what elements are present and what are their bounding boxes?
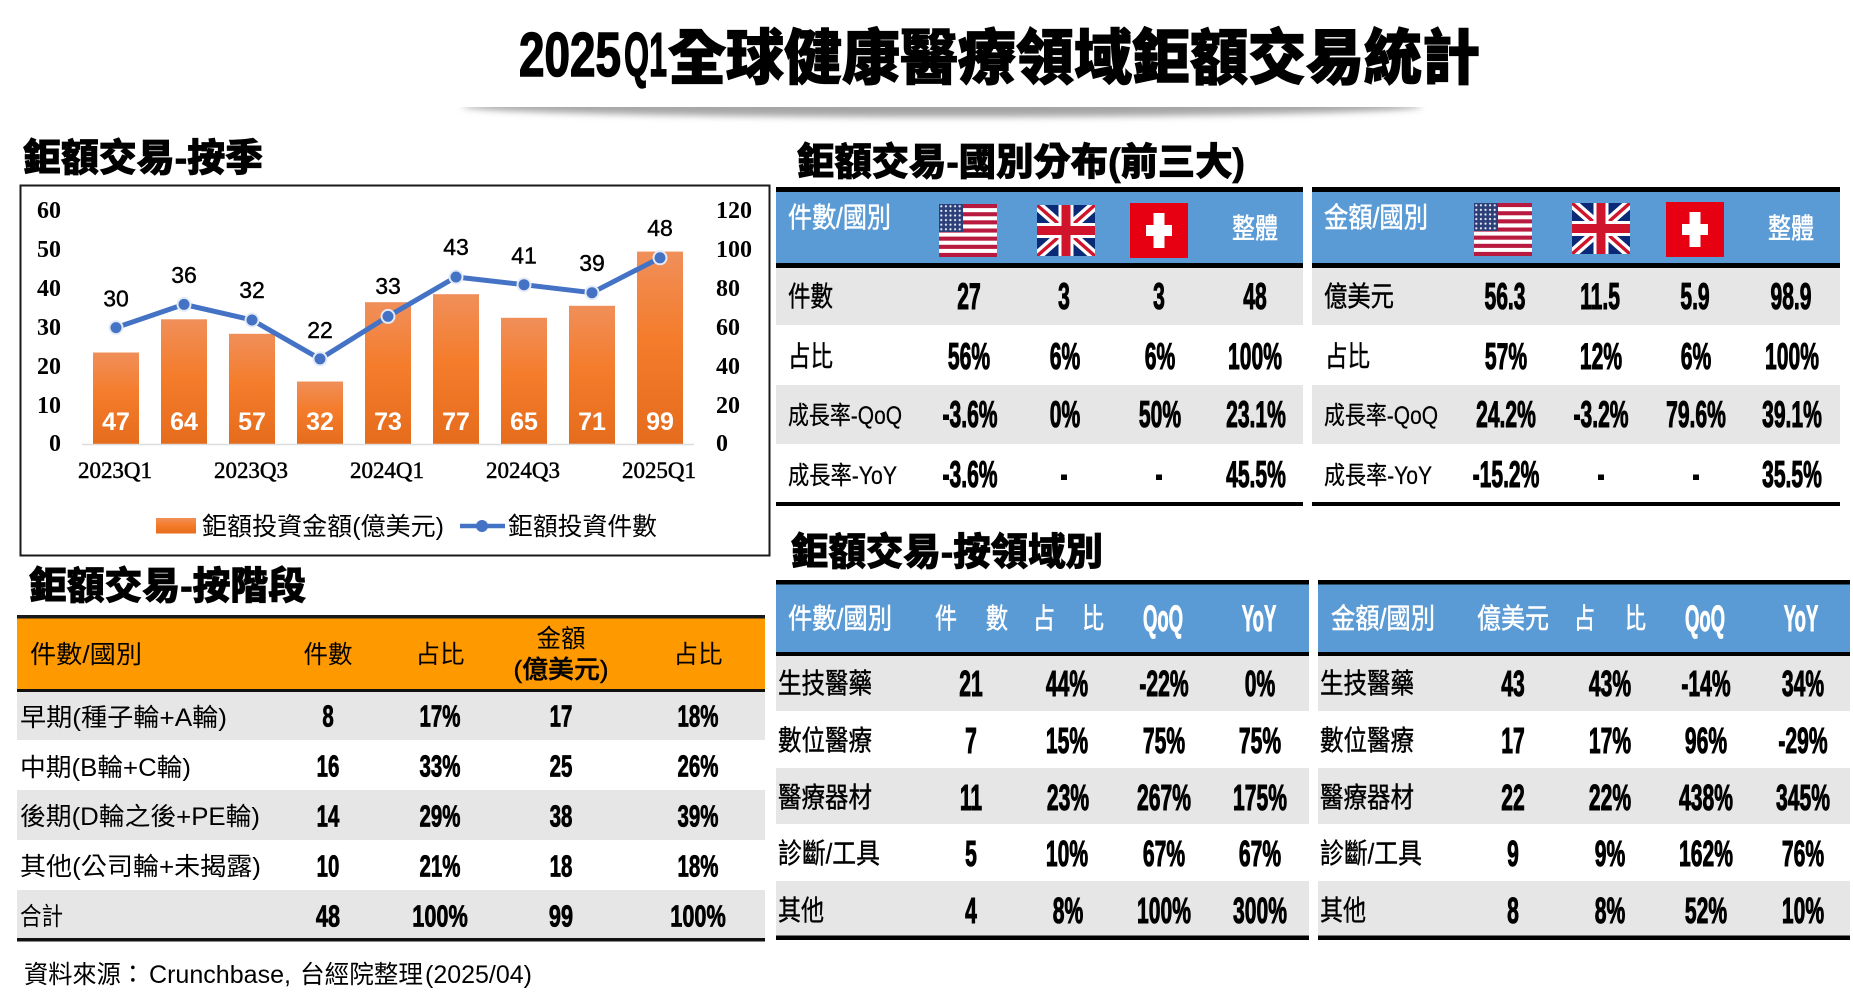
country count rows: 6% [1050, 337, 1080, 378]
sector count rows: 8% [1053, 891, 1083, 932]
sector count rows: 7 [965, 721, 977, 762]
sector amount rows: 43% [1589, 664, 1631, 705]
sector count rows: 267% [1137, 778, 1191, 819]
country count rows: 27 [957, 277, 981, 318]
stage table header [17, 615, 765, 692]
sector amount rows: 8 [1507, 891, 1519, 932]
bar value labels: 47 [102, 408, 130, 436]
stage rows: 後期(D輪之後+PE輪) [20, 803, 260, 831]
stage rows: 18 [550, 848, 572, 884]
x axis labels: 2023Q3 [214, 458, 288, 483]
panel: country count table [776, 187, 1303, 506]
stage table header: (億美元) [514, 656, 608, 684]
right axis labels: 60 [716, 315, 740, 341]
title: 全球健康醫療領域鉅額交易統計 [668, 25, 1480, 92]
stage rows: 17% [420, 698, 460, 734]
stage table header: 占比 [416, 641, 464, 669]
source note: (2025/04) [425, 961, 532, 989]
sector count header: 比 [1082, 603, 1104, 634]
country count rows: 6% [1145, 337, 1175, 378]
sector amount rows: 17 [1501, 721, 1525, 762]
sector amount rows: 52% [1685, 891, 1727, 932]
sector count rows: 175% [1233, 778, 1287, 819]
sector amount rows: 438% [1679, 778, 1733, 819]
country amount rows: 39.1% [1762, 395, 1822, 436]
stage rows: 10 [317, 848, 339, 884]
sector amount header: 占 [1574, 603, 1595, 634]
sector count rows: 11 [960, 778, 982, 819]
stage rows: 38 [550, 798, 572, 834]
x axis labels: 2025Q1 [622, 458, 696, 483]
sector amount rows: 345% [1776, 778, 1830, 819]
line value labels: 41 [511, 242, 537, 268]
x axis labels: 2024Q3 [486, 458, 560, 483]
icon: US flag [1474, 203, 1532, 256]
sector amount header: 億美元 [1477, 603, 1549, 634]
country amount rows: 57% [1485, 337, 1527, 378]
stage rows: 17 [550, 698, 572, 734]
stage rows: 29% [420, 798, 460, 834]
sector amount rows: 9 [1507, 834, 1519, 875]
stage rows [17, 692, 765, 942]
stage rows: 100% [670, 899, 726, 933]
country count rows: -3.6% [942, 455, 998, 496]
sector count rows: 醫療器材 [778, 782, 872, 813]
country count rows: 成長率-YoY [788, 462, 897, 490]
sector amount rows: 其他 [1320, 895, 1366, 926]
sector amount rows: 8% [1595, 891, 1625, 932]
sector count rows: 75% [1239, 721, 1281, 762]
sector count rows [776, 656, 1309, 940]
sector count rows: 44% [1046, 664, 1088, 705]
left axis labels: 0 [49, 431, 61, 457]
title: Q1 [624, 21, 667, 90]
sector amount rows: -29% [1778, 721, 1828, 762]
source note: 台經院整理 [300, 961, 423, 989]
country amount rows: 6% [1681, 337, 1711, 378]
line value labels: 30 [103, 286, 129, 312]
sector amount header [1318, 580, 1850, 656]
stage rows: 18% [678, 848, 718, 884]
country count rows: - [1060, 455, 1068, 496]
country count rows: 23.1% [1226, 395, 1286, 436]
line value labels: 33 [375, 273, 401, 299]
sector count header: 件 [935, 603, 957, 634]
country count header: 整體 [1232, 213, 1278, 244]
x axis labels: 2024Q1 [350, 458, 424, 483]
bar value labels [102, 408, 674, 436]
line value labels [103, 215, 673, 343]
sector count rows: 生技醫藥 [778, 668, 872, 699]
title: 2025 [519, 21, 621, 90]
left axis labels: 10 [37, 393, 61, 419]
country amount rows: 35.5% [1762, 455, 1822, 496]
panel: by stage table [17, 615, 765, 942]
heading: by stage: 鉅額交易-按階段 [29, 565, 306, 608]
line value labels: 48 [647, 215, 673, 241]
country count rows: 件數 [788, 281, 833, 312]
sector amount rows: 10% [1782, 891, 1824, 932]
bar value labels: 64 [170, 408, 198, 436]
stage table header: 件數/國別 [30, 641, 142, 669]
bars: deal amount [93, 252, 683, 444]
sector count rows: 5 [965, 834, 977, 875]
left axis labels: 30 [37, 315, 61, 341]
stage rows: 33% [420, 748, 460, 784]
country amount rows: 成長率-YoY [1324, 462, 1432, 490]
legend: 鉅額投資金額(億美元) [202, 513, 444, 541]
sector count rows: 21 [959, 664, 983, 705]
stage rows: 18% [678, 698, 718, 734]
stage rows: 合計 [20, 903, 63, 931]
panel: country amount table [1312, 187, 1840, 506]
sector count rows: 67% [1143, 834, 1185, 875]
sector amount rows: 34% [1782, 664, 1824, 705]
sector count rows: 其他 [778, 895, 824, 926]
sector count rows: 10% [1046, 834, 1088, 875]
stage rows: 48 [316, 899, 340, 933]
country count rows: 3 [1153, 277, 1165, 318]
left axis labels: 50 [37, 237, 61, 263]
right axis labels: 120 [716, 198, 752, 224]
country amount rows: 56.3 [1484, 277, 1526, 318]
stage rows: 14 [317, 798, 340, 834]
bar value labels: 71 [578, 408, 606, 436]
country amount rows: 100% [1765, 337, 1819, 378]
bar value labels: 99 [646, 408, 674, 436]
sector count rows: 75% [1143, 721, 1185, 762]
bar value labels: 77 [442, 408, 470, 436]
country amount rows: -3.2% [1573, 395, 1629, 436]
country count rows: - [1155, 455, 1163, 496]
sector count rows: -22% [1139, 664, 1189, 705]
country count rows: 占比 [788, 341, 833, 372]
sector amount header: 金額/國別 [1331, 603, 1435, 634]
country count rows: 48 [1243, 277, 1267, 318]
sector count header: 數 [986, 603, 1008, 634]
country amount rows: - [1597, 455, 1605, 496]
bar value labels: 65 [510, 408, 538, 436]
x axis labels: 2023Q1 [78, 458, 152, 483]
stage rows: 26% [678, 748, 718, 784]
sector amount rows: 數位醫療 [1320, 725, 1414, 756]
source note [24, 961, 532, 989]
source note: Crunchbase, [149, 961, 291, 989]
icon: Swiss flag [1130, 203, 1188, 258]
sector amount rows: 43 [1501, 664, 1525, 705]
sector amount header: QoQ [1685, 599, 1725, 640]
stage rows: 25 [550, 748, 572, 784]
left axis labels: 20 [37, 354, 61, 380]
sector count rows: 診斷/工具 [778, 838, 880, 869]
sector amount rows: 生技醫藥 [1320, 668, 1414, 699]
country amount rows: 12% [1580, 337, 1622, 378]
country amount header [1312, 187, 1840, 268]
line: deal count [110, 251, 666, 365]
heading: quarterly: 鉅額交易-按季 [23, 137, 263, 180]
country amount rows: 24.2% [1476, 395, 1536, 436]
line value labels: 32 [239, 277, 265, 303]
icon: UK flag [1037, 205, 1095, 256]
icon: US flag [939, 204, 997, 257]
sector amount rows: 76% [1782, 834, 1824, 875]
country amount rows: -15.2% [1473, 455, 1539, 496]
sector count rows: 數位醫療 [778, 725, 872, 756]
sector amount rows: 22 [1501, 778, 1525, 819]
sector amount rows: 醫療器材 [1320, 782, 1414, 813]
country amount rows [1312, 268, 1840, 506]
country count rows: 成長率-QoQ [788, 402, 902, 430]
sector amount rows: 17% [1589, 721, 1631, 762]
title underline shadow [462, 107, 1422, 122]
country amount rows: 98.9 [1770, 277, 1812, 318]
left axis labels: 40 [37, 276, 61, 302]
bar value labels: 57 [238, 408, 266, 436]
country count rows: 3 [1058, 277, 1070, 318]
sector count rows: 23% [1047, 778, 1089, 819]
country count rows: -3.6% [942, 395, 998, 436]
sector count rows: 0% [1245, 664, 1275, 705]
sector count header: 件數/國別 [788, 603, 892, 634]
stage rows: 8 [322, 698, 334, 734]
bar value labels: 32 [306, 408, 334, 436]
heading: by sector: 鉅額交易-按領域別 [791, 531, 1103, 574]
line value labels: 43 [443, 234, 469, 260]
legend [156, 513, 657, 541]
icon: Swiss flag [1666, 202, 1724, 257]
sector count header [776, 580, 1309, 656]
sector amount rows: 9% [1595, 834, 1625, 875]
right axis labels: 40 [716, 354, 740, 380]
sector amount rows [1318, 656, 1850, 940]
sector amount rows: 22% [1589, 778, 1631, 819]
country amount header: 金額/國別 [1324, 202, 1428, 233]
sector count header: 占 [1033, 603, 1055, 634]
stage table header: 占比 [674, 641, 722, 669]
country count rows: 45.5% [1226, 455, 1286, 496]
heading: by country: 鉅額交易-國別分布(前三大) [797, 141, 1245, 184]
right axis labels [716, 198, 752, 457]
sector amount header: YoY [1784, 599, 1819, 640]
stage rows: 21% [420, 848, 460, 884]
stage table header: 金額 [536, 625, 586, 653]
panel: sector amount table [1318, 580, 1850, 940]
country amount rows: 79.6% [1666, 395, 1726, 436]
country count rows: 100% [1228, 337, 1282, 378]
country count rows [776, 268, 1303, 506]
country amount rows: 成長率-QoQ [1324, 402, 1438, 430]
stage rows: 16 [317, 748, 339, 784]
country amount header: 整體 [1768, 213, 1814, 244]
panel: quarterly chart [20, 186, 770, 556]
right axis labels: 20 [716, 393, 740, 419]
line value labels: 39 [579, 250, 605, 276]
right axis labels: 0 [716, 431, 728, 457]
sector count header: YoY [1242, 599, 1277, 640]
country amount rows: 5.9 [1680, 277, 1710, 318]
stage rows: 99 [549, 899, 573, 933]
country count rows: 50% [1139, 395, 1181, 436]
left axis labels [37, 198, 61, 457]
sector amount rows: 162% [1679, 834, 1733, 875]
country count rows: 56% [948, 337, 990, 378]
country amount rows: 11.5 [1580, 277, 1620, 318]
sector count rows: 4 [965, 891, 977, 932]
stage rows: 100% [412, 899, 468, 933]
sector amount rows: -14% [1681, 664, 1731, 705]
country amount rows: 億美元 [1324, 281, 1394, 312]
sector count rows: 100% [1137, 891, 1191, 932]
source note: 資料來源： [24, 961, 145, 989]
legend: 鉅額投資件數 [508, 513, 657, 541]
stage rows: 39% [678, 798, 718, 834]
x axis labels [78, 458, 696, 483]
left axis labels: 60 [37, 198, 61, 224]
stage rows: 早期(種子輪+A輪) [20, 704, 227, 732]
sector amount rows: 診斷/工具 [1320, 838, 1422, 869]
country count header: 件數/國別 [788, 202, 891, 233]
icon: UK flag [1572, 203, 1630, 254]
sector count rows: 67% [1239, 834, 1281, 875]
sector amount header: 比 [1625, 603, 1646, 634]
country count header [776, 187, 1303, 268]
stage rows: 中期(B輪+C輪) [20, 754, 191, 782]
stage rows: 其他(公司輪+未揭露) [20, 853, 261, 881]
sector amount rows: 96% [1685, 721, 1727, 762]
country count rows: 0% [1050, 395, 1080, 436]
panel: sector count table [776, 580, 1309, 940]
country amount rows: - [1692, 455, 1700, 496]
bar value labels: 73 [374, 408, 402, 436]
sector count header: QoQ [1143, 599, 1183, 640]
right axis labels: 80 [716, 276, 740, 302]
sector count rows: 15% [1046, 721, 1088, 762]
sector count rows: 300% [1233, 891, 1287, 932]
stage table header: 件數 [304, 641, 352, 669]
line value labels: 22 [307, 317, 333, 343]
line value labels: 36 [171, 262, 197, 288]
right axis labels: 100 [716, 237, 752, 263]
country amount rows: 占比 [1325, 341, 1370, 372]
